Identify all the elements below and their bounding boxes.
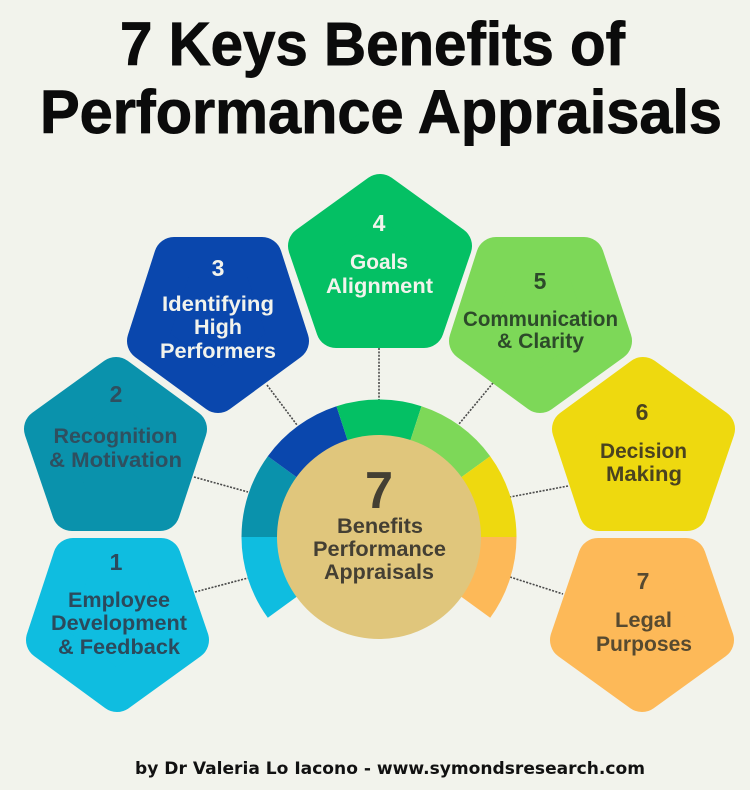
title: 7 Keys Benefits of [120, 10, 626, 78]
panel: benefit 2: & Motivation [49, 449, 182, 472]
panel: benefit 6 [572, 377, 715, 511]
panel: benefit 2 [44, 377, 187, 511]
panel: benefit 7: 7 [637, 568, 649, 594]
title: Performance Appraisals [40, 78, 722, 146]
panel: benefit 5: 5 [534, 268, 547, 294]
panel: benefit 3: 3 [212, 255, 224, 281]
panel: centre circle: Appraisals [324, 561, 434, 584]
panel: benefit 7: Purposes [596, 633, 692, 656]
panel: centre circle: Benefits [337, 515, 423, 538]
title [40, 10, 722, 146]
panel: benefit 3: Performers [160, 340, 276, 363]
dotted connectors [194, 348, 568, 594]
panel: benefit 5: Communication [463, 308, 618, 331]
panel: benefit 1: Development [51, 612, 187, 635]
panel: benefit 1 [46, 549, 189, 692]
panel: benefit 2: Recognition [54, 425, 178, 448]
panel: centre circle: 7 [365, 462, 393, 520]
panel: benefit 4: 4 [373, 210, 386, 236]
panel: centre circle: Performance [313, 538, 446, 561]
panel: benefit 6: 6 [636, 399, 648, 425]
panel: benefit 6: Decision [600, 440, 687, 463]
panel: benefit 4: Goals [350, 251, 408, 274]
panel: benefit 1: 1 [110, 549, 123, 575]
panel: benefit 7: Legal [615, 609, 672, 632]
panel: benefit 5 [463, 257, 618, 393]
panel: benefit 6: Making [606, 463, 682, 486]
chart: seven segment ring [242, 399, 516, 618]
panel: benefit 2: 2 [110, 381, 122, 407]
panel: benefit 4 [308, 194, 452, 328]
panel: benefit 3 [147, 255, 289, 393]
panel: benefit 1: Employee [68, 589, 170, 612]
panel: benefit 4: Alignment [326, 275, 433, 298]
panel: benefit 5: & Clarity [497, 330, 584, 353]
panel: benefit 3: Identifying [162, 293, 274, 316]
panel: benefit 1: & Feedback [58, 636, 180, 659]
panel: centre circle [277, 435, 481, 639]
footer credit: by Dr Valeria Lo Iacono - www.symondsresearch.com [135, 759, 645, 779]
panel: benefit 7 [570, 558, 714, 692]
panel: benefit 3: High [194, 316, 242, 339]
